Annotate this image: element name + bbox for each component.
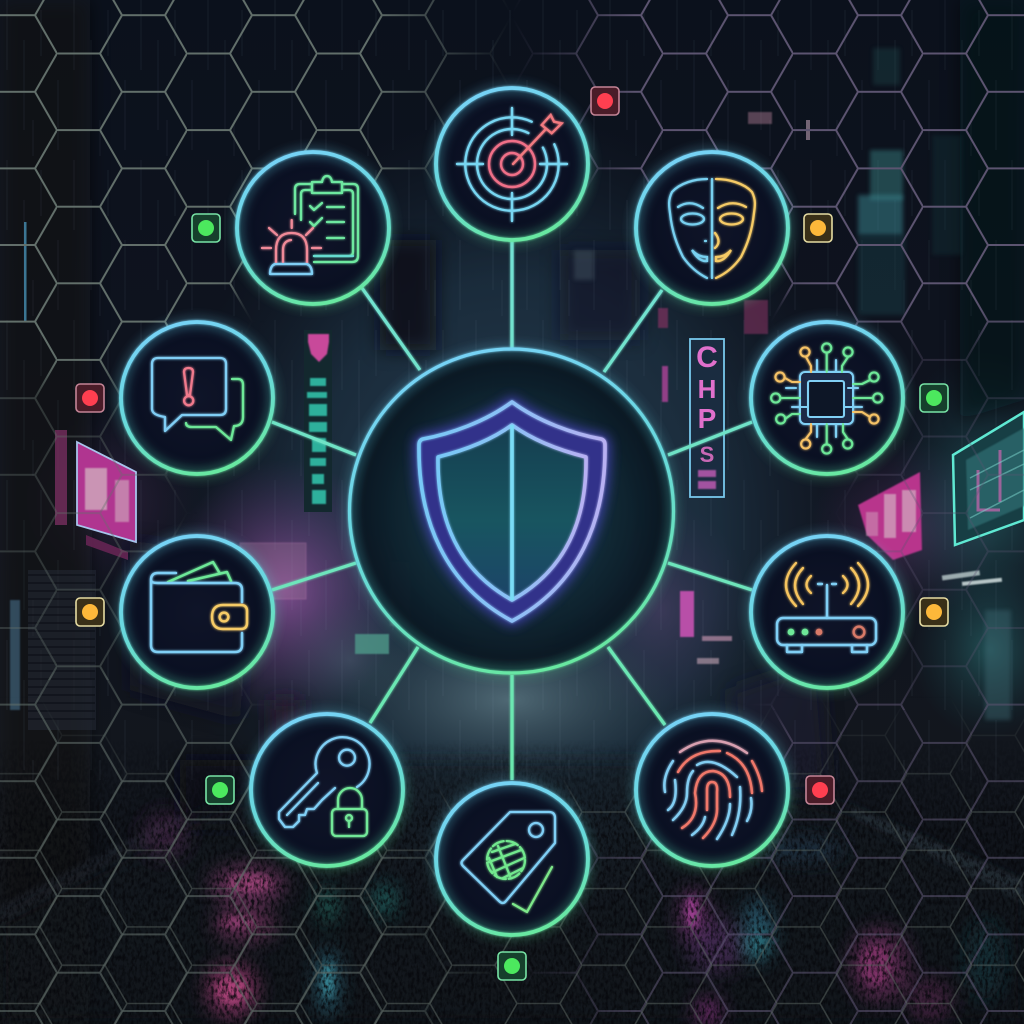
central hub (350, 349, 674, 673)
road texture (0, 740, 1024, 1024)
icon: wallet (151, 562, 247, 652)
status: router amber (920, 598, 948, 626)
icon: half-and-half mask (669, 179, 755, 278)
sign: CHPS vertical neon: S (700, 442, 714, 467)
icon: key with padlock (279, 737, 370, 836)
status: mask amber (804, 214, 832, 242)
node: key and lock (251, 714, 403, 866)
sign: CHPS vertical neon: C (696, 341, 718, 374)
node: fingerprint (636, 714, 788, 866)
icon: alert checklist (262, 176, 358, 274)
status: key green (206, 776, 234, 804)
status: chat red (76, 384, 104, 412)
node: chat alert (121, 322, 273, 474)
sign: right teal billboard (953, 412, 1024, 545)
node: microchip (751, 322, 903, 474)
rain streaks (0, 0, 1024, 780)
sign: right pink billboard (858, 472, 922, 560)
small building lights (10, 48, 1011, 720)
sign: vertical teal street sign (304, 330, 332, 512)
sign: faded pink panel behind wallet connector (240, 543, 306, 599)
node: target (436, 88, 588, 240)
icon: shield (419, 402, 605, 621)
icon: tag with globe and check (462, 812, 555, 912)
node: tag (436, 783, 588, 935)
icon: wifi router (777, 563, 876, 652)
status: target red (591, 87, 619, 115)
status: fingerprint red (806, 776, 834, 804)
connectors from hub to nodes (272, 240, 752, 780)
icon: speech bubbles (152, 358, 243, 440)
status: wallet amber (76, 598, 104, 626)
node: wallet (121, 536, 273, 688)
icon: target with arrow (457, 108, 567, 221)
sign: CHPS vertical neon: P (698, 403, 716, 434)
node: clipboard and siren (237, 152, 389, 304)
sign: CHPS vertical neon: H (698, 374, 716, 404)
sign: left pink billboard (55, 430, 136, 560)
status: clipboard green (192, 214, 220, 242)
icon: fingerprint (664, 741, 762, 839)
node: router (751, 536, 903, 688)
status: tag green (498, 952, 526, 980)
status: chip green (920, 384, 948, 412)
node: mask (636, 152, 788, 304)
icon: chip with traces (771, 343, 882, 454)
road and reflections (0, 760, 1024, 1024)
rolling shutter (28, 570, 96, 730)
sign: CHPS vertical neon (690, 339, 724, 497)
